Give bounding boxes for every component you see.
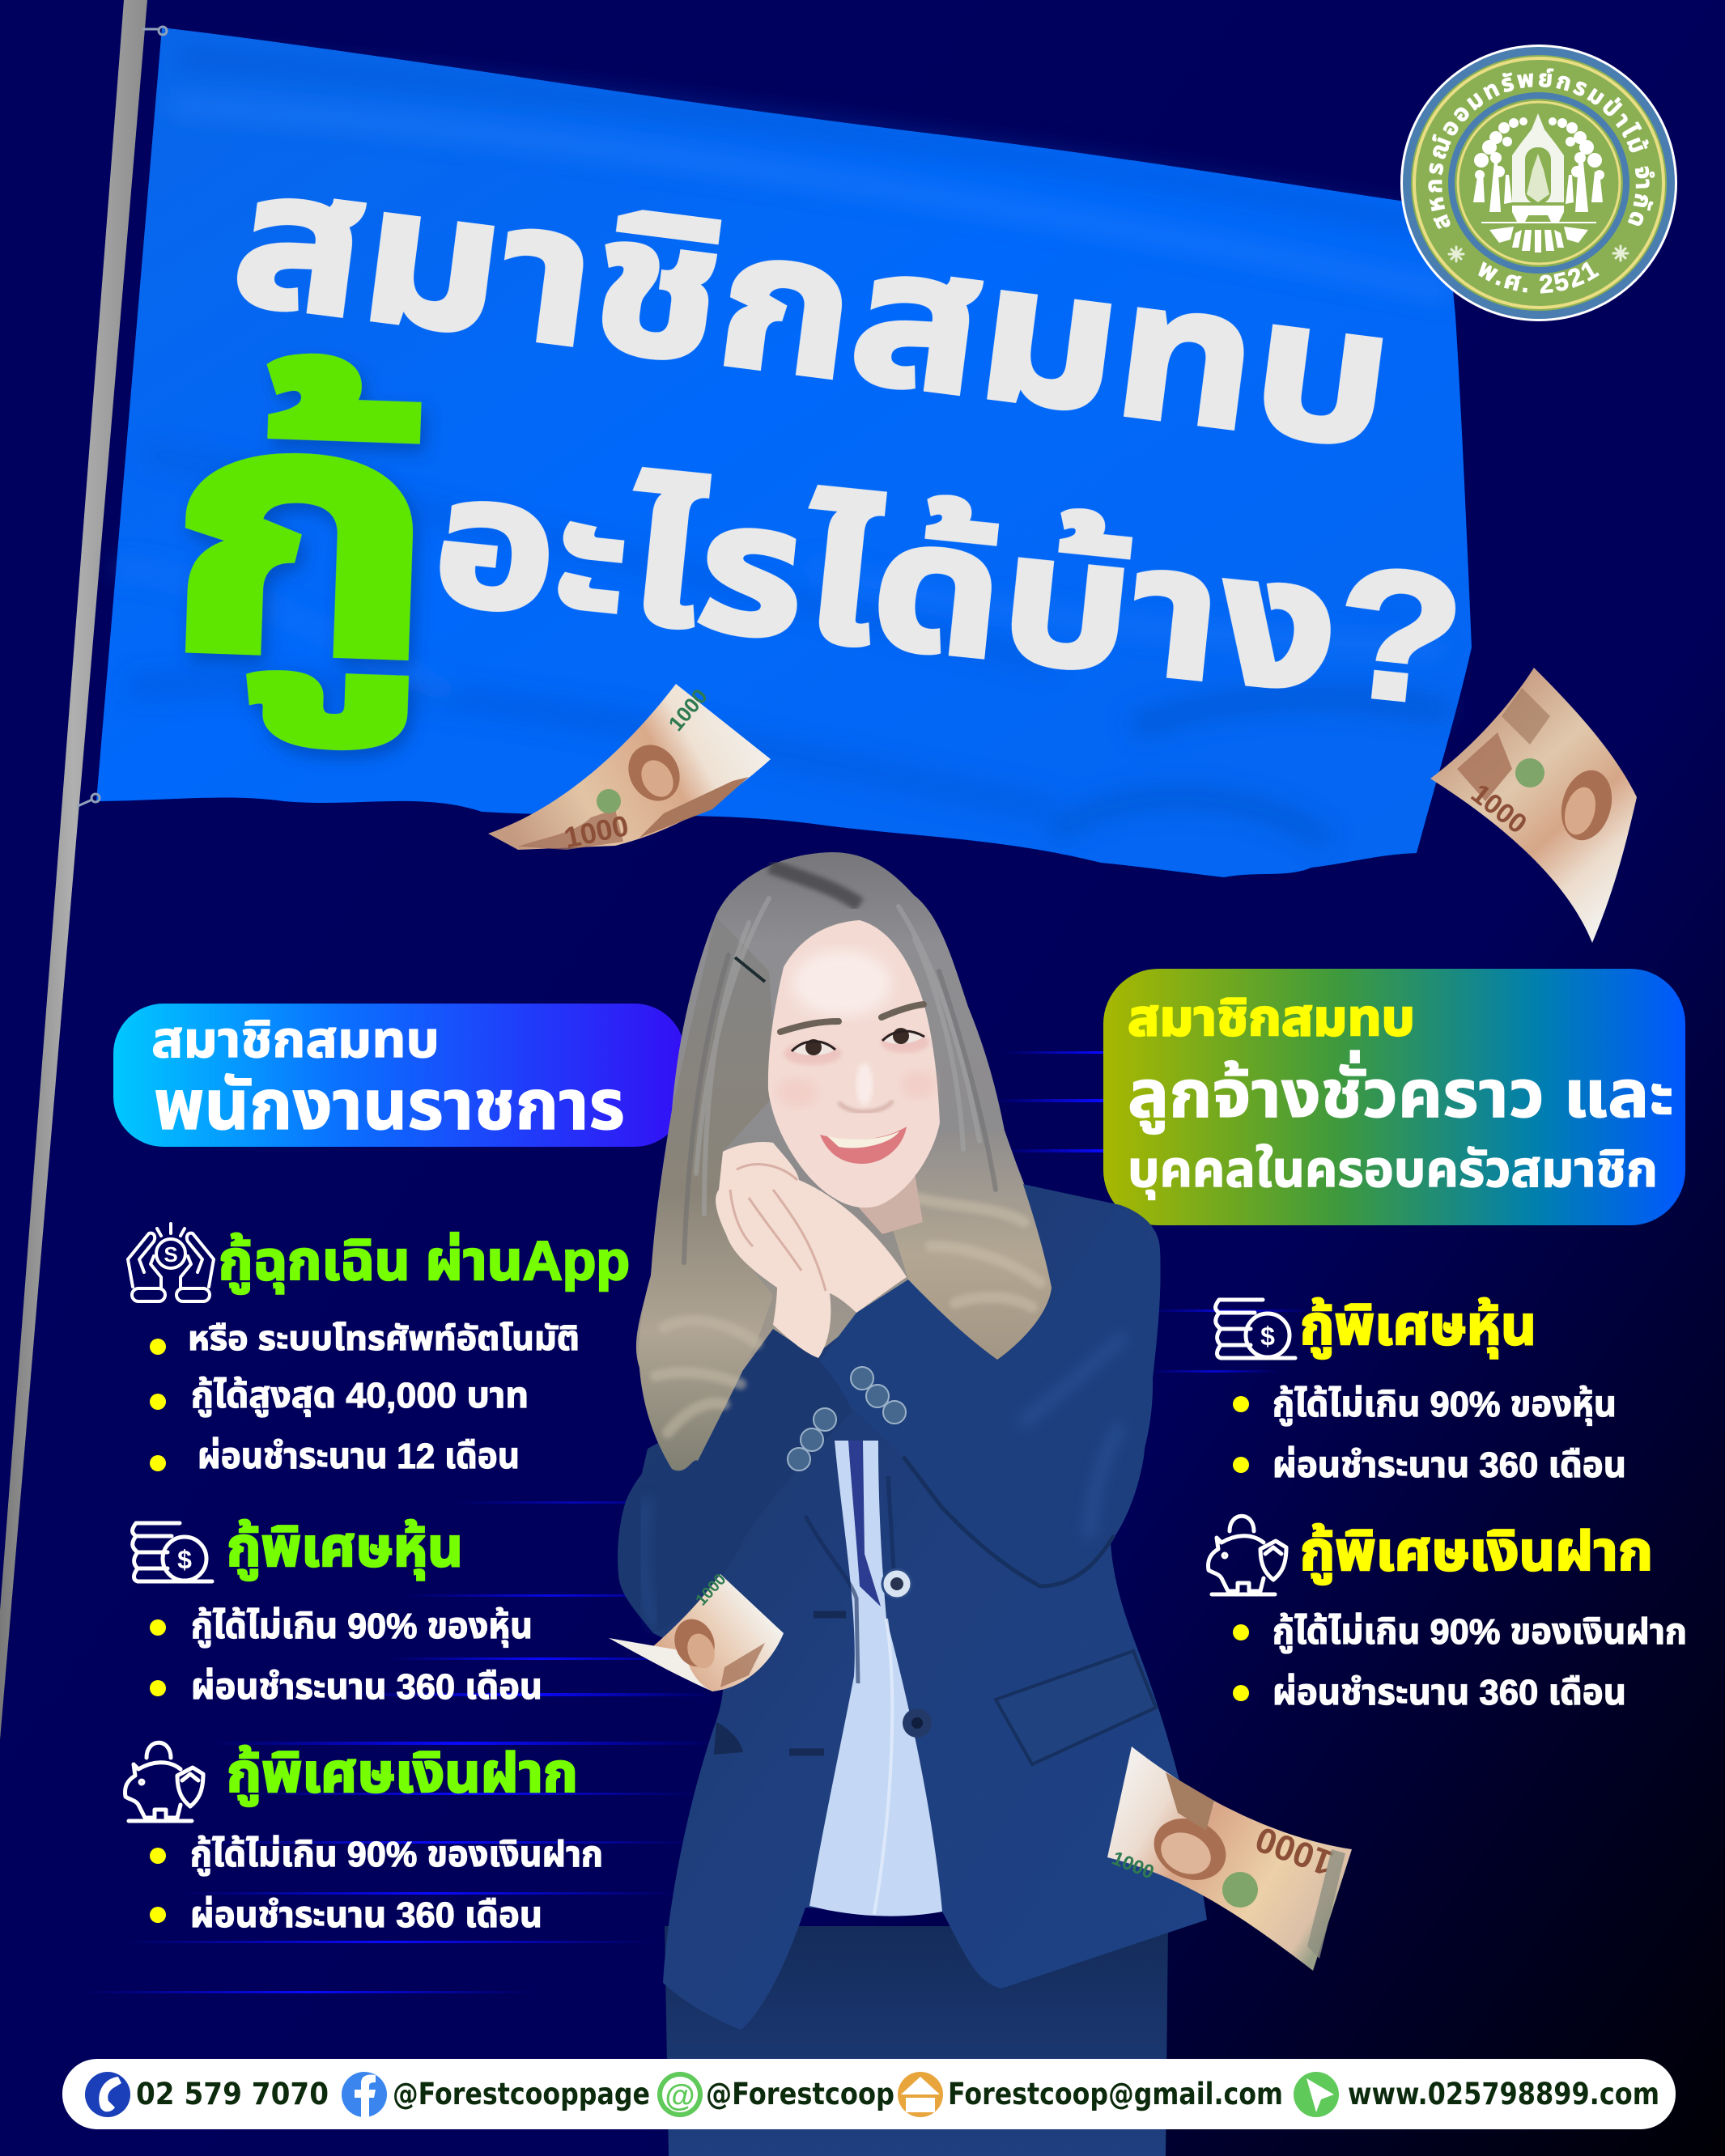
heading: กู้พิเศษเงินฝาก [227,1742,578,1806]
horizontal light lines [81,1051,1311,1993]
banknote: on hip: 1000 [1109,1848,1157,1884]
section: emergency loan left: ผ่อนชำระนาน 12 เดือน [198,1437,520,1476]
icon: phone [85,2072,130,2117]
right heading pill [1103,969,1685,1225]
icon: line at: @ [665,2079,695,2113]
phone number: 02 579 7070 [136,2077,329,2111]
jacket body [618,1184,1207,2030]
hair part [770,866,860,905]
text lines: กู้ได้ไม่เกิน 90% ของเงินฝาก [190,1835,603,1876]
skirt [665,1926,1168,2156]
pill line two: ลูกจ้างชั่วคราว และ [1128,1050,1674,1135]
icon: mail house [898,2072,943,2117]
logo year: พ.ศ. 2521 [1478,261,1600,294]
icon: hands with coin: S [164,1242,178,1267]
forehead highlight [793,951,890,1016]
hands [716,1142,907,1358]
text lines: กู้ได้ไม่เกิน 90% ของเงินฝาก [1273,1612,1687,1653]
icon: coins [1216,1300,1295,1358]
finger lines [730,1165,826,1291]
right trees [1549,117,1557,125]
sleeve buttons [788,1367,906,1471]
text lines: กู้ได้ไม่เกิน 90% ของหุ้น [191,1606,533,1648]
section: share loan right: ผ่อนชำระนาน 360 เดือน [1273,1445,1626,1485]
bullets [150,1619,166,1696]
flag fold shading [113,57,1449,842]
title line two: อะไรได้บ้าง? [425,435,1472,744]
shirt [809,1441,942,1916]
face [768,920,940,1207]
logo stars [1449,246,1628,261]
shrine [1512,113,1564,202]
shirt placket [848,1441,881,1606]
nose [839,1063,893,1112]
website: www.025798899.com [1348,2077,1659,2111]
left trees [1519,117,1527,125]
pill line two: พนักงานราชการ [154,1067,625,1144]
heading: กู้พิเศษหุ้น [1300,1295,1536,1359]
eye shadow [784,1042,842,1065]
icon: coins [133,1523,212,1581]
icon: facebook [342,2072,387,2117]
left hair lobe [639,916,777,1471]
hair back [636,852,1052,1469]
section: share loan left [133,1517,542,1707]
woman illustration [618,852,1207,2156]
bullets [1233,1396,1249,1473]
email: Forestcoop@gmail.com [948,2077,1283,2111]
neck shadow [850,1173,923,1234]
banknote: on flag [488,684,771,855]
hair curls and strands [656,898,1040,1432]
left heading pill [113,1004,685,1147]
jacket front shadow edges [805,1476,894,1683]
section: deposit loan left: ผ่อนชำระนาน 360 เดือน [190,1895,542,1935]
section: emergency loan left: กู้ได้สูงสุด 40,000 บาท [191,1376,529,1417]
icon: coins: $ [1260,1322,1275,1351]
banknote: on flag: 1000 [664,684,712,736]
banknote: on hip: 1000 [1251,1819,1338,1883]
bullets [150,1339,166,1471]
logo emblem: shrine, trees and logs [1473,113,1604,253]
footer contact bar [62,2059,1676,2129]
heading: กู้พิเศษหุ้น [227,1517,463,1581]
icon: hands with coin [128,1224,214,1301]
right hair lobe [890,1131,1052,1360]
logo ring text: สหกรณ์ออมทรัพย์กรมป่าไม้ จำกัด [1428,68,1655,229]
left sleeve [618,1329,852,1633]
flag grommets [78,27,167,806]
section: emergency loan left [128,1224,630,1476]
left eye [792,1039,835,1055]
mouth [820,1127,907,1164]
section: share loan left: ผ่อนชำระนาน 360 เดือน [191,1667,542,1707]
pill line one: สมาชิกสมทบ [151,1012,440,1068]
icon: line at [657,2072,703,2117]
section: deposit loan left [125,1742,603,1935]
cheeks [776,1078,818,1107]
section: deposit loan right [1208,1516,1687,1712]
banknote: right of flag [1430,668,1637,943]
logs [1489,227,1588,253]
title line one: สมาชิกสมทบ [223,129,1403,488]
note portrait [618,736,690,810]
text lines: กู้ได้ไม่เกิน 90% ของหุ้น [1273,1385,1617,1426]
section: share loan right [1216,1295,1626,1485]
banknote: right of flag: 1000 [1465,778,1532,840]
facebook handle: @Forestcooppage [393,2077,650,2111]
icon: web cursor [1294,2072,1339,2117]
hair pin [735,957,765,982]
icon: coins: $ [177,1545,192,1574]
jacket buttons [882,1569,911,1598]
bullets [1233,1624,1249,1701]
section: deposit loan right: ผ่อนชำระนาน 360 เดือน [1273,1673,1626,1712]
right sleeve [813,1205,1160,1586]
right eye [882,1028,924,1044]
bullets [150,1848,166,1923]
icon: piggy bank [125,1742,203,1821]
flag [96,28,1472,877]
icon: piggy bank [1208,1516,1286,1594]
jacket pocket [996,1651,1156,1764]
flagpole [0,0,147,1740]
banknote: on sleeve: 1000 [692,1571,729,1609]
heading: กู้ฉุกเฉิน ผ่านApp [219,1230,630,1294]
heading: กู้พิเศษเงินฝาก [1300,1521,1653,1585]
title green word: กู้ [159,334,445,749]
line handle: @Forestcoop [706,2077,894,2111]
pill line three: บุคคลในครอบครัวสมาชิก [1128,1142,1658,1199]
banknote: on sleeve [609,1571,784,1691]
pill line one: สมาชิกสมทบ [1128,991,1415,1046]
banknote: on flag: 1000 [561,808,631,855]
logo [1400,45,1677,321]
text lines: หรือ ระบบโทรศัพท์อัตโนมัติ [188,1319,580,1357]
eyebrows [780,1004,924,1032]
banknote: on hip [1107,1746,1352,1971]
